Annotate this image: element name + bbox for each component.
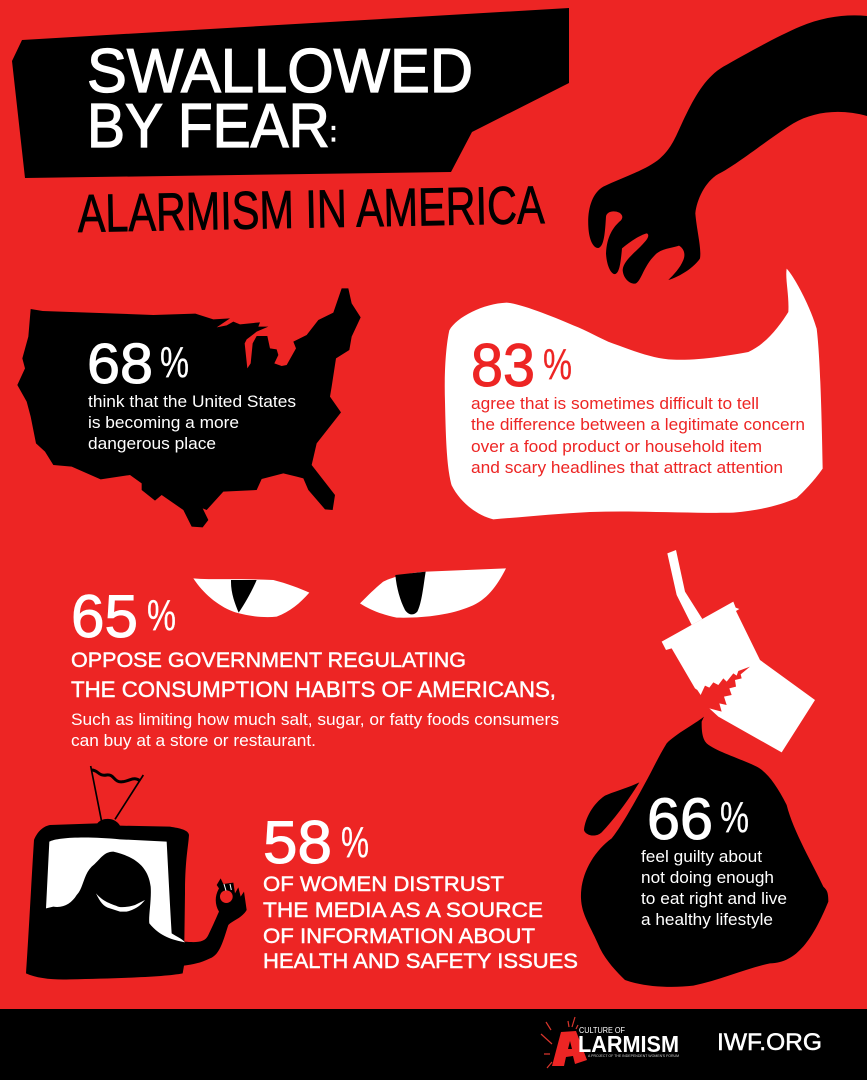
stat: 68% xyxy=(87,332,189,396)
logo: Culture of Alarmism: A PROJECT OF THE INDEPENDENT WOMEN'S FORUM xyxy=(588,1054,679,1058)
text: 66% description: to eat right and live xyxy=(641,890,787,908)
text: 58% statement: OF WOMEN DISTRUST xyxy=(263,873,504,896)
text: 68% description: think that the United States xyxy=(88,393,296,411)
stat: 66%: 66 xyxy=(647,787,713,852)
panel: 68 percent on US map xyxy=(17,288,361,527)
logo: Culture of Alarmism xyxy=(541,1017,679,1068)
heading: 65% statement: OPPOSE GOVERNMENT REGULATING xyxy=(71,649,466,672)
stat: 83%: 83 xyxy=(471,332,535,399)
heading: 65% statement xyxy=(71,649,556,702)
logo: Culture of Alarmism: LARMISM xyxy=(578,1031,679,1057)
icon: United States map xyxy=(17,288,361,527)
stat: 68%: % xyxy=(160,338,189,387)
footer bar xyxy=(0,1009,867,1080)
stat: 58%: 58 xyxy=(263,809,332,876)
television body and arm xyxy=(26,819,247,979)
hand hole and held object xyxy=(220,884,233,903)
icon: black spill xyxy=(581,717,828,987)
text: 65% description xyxy=(71,711,559,750)
monster teeth xyxy=(96,893,145,912)
television antenna xyxy=(91,766,143,822)
text: 66% description: a healthy lifestyle xyxy=(641,911,773,929)
panel: 58 percent xyxy=(263,809,578,973)
main title: : xyxy=(330,116,337,147)
text: 65% description: can buy at a store or restaurant. xyxy=(71,732,316,750)
text: 58% statement: HEALTH AND SAFETY ISSUES xyxy=(263,950,578,973)
panel: 66 percent on spill xyxy=(581,717,828,987)
subtitle: ALARMISM IN AMERICA xyxy=(77,176,545,244)
icon: speech bubble xyxy=(445,269,823,519)
stat: 83%: % xyxy=(543,340,572,389)
text: 83% description: and scary headlines that attract attention xyxy=(471,459,783,477)
stat: 66%: % xyxy=(720,793,749,842)
stat: 58%: % xyxy=(341,818,369,867)
stat: 66% xyxy=(647,787,749,852)
icon: monster arm xyxy=(588,15,867,284)
text: 66% description: not doing enough xyxy=(641,869,774,887)
text: 65% description: Such as limiting how much salt, sugar, or fatty foods consumers xyxy=(71,711,559,729)
icon: cup and straw xyxy=(662,550,815,752)
text: 83% description: the difference between a legitimate concern xyxy=(471,416,805,434)
icon: television monster xyxy=(26,766,247,979)
stat: 68%: 68 xyxy=(87,332,153,396)
main title: BY FEAR xyxy=(87,92,351,161)
stat: 65%: 65 xyxy=(71,583,138,650)
main title xyxy=(87,37,473,161)
title block xyxy=(12,8,569,244)
text: 83% description: agree that is sometimes difficult to tell xyxy=(471,395,759,413)
stat: 58% xyxy=(263,809,369,876)
text: 68% description: is becoming a more xyxy=(88,414,239,432)
text: 58% statement: OF INFORMATION ABOUT xyxy=(263,925,535,948)
text: 66% description: feel guilty about xyxy=(641,848,762,866)
heading: 65% statement: THE CONSUMPTION HABITS OF AMERICANS, xyxy=(71,677,556,702)
main title: SWALLOWED xyxy=(87,37,473,106)
panel: 83 percent speech bubble xyxy=(445,269,823,519)
website: IWF.ORG xyxy=(717,1029,822,1056)
text: 68% description: dangerous place xyxy=(88,435,216,453)
text: 58% statement: THE MEDIA AS A SOURCE xyxy=(263,899,543,922)
text: 58% statement xyxy=(263,873,578,973)
stat: 65%: % xyxy=(147,591,176,640)
text: 83% description xyxy=(471,395,805,477)
stat: 83% xyxy=(471,332,572,399)
panel: 65 percent xyxy=(71,583,559,750)
icon: monster eyes xyxy=(193,568,506,618)
logo: Culture of Alarmism: CULTURE OF xyxy=(579,1025,625,1035)
text: 66% description xyxy=(641,848,787,929)
title banner xyxy=(12,8,569,178)
stat: 65% xyxy=(71,583,176,650)
television screen xyxy=(46,837,185,942)
text: 83% description: over a food product or household item xyxy=(471,438,762,456)
text: 68% description xyxy=(88,393,296,453)
